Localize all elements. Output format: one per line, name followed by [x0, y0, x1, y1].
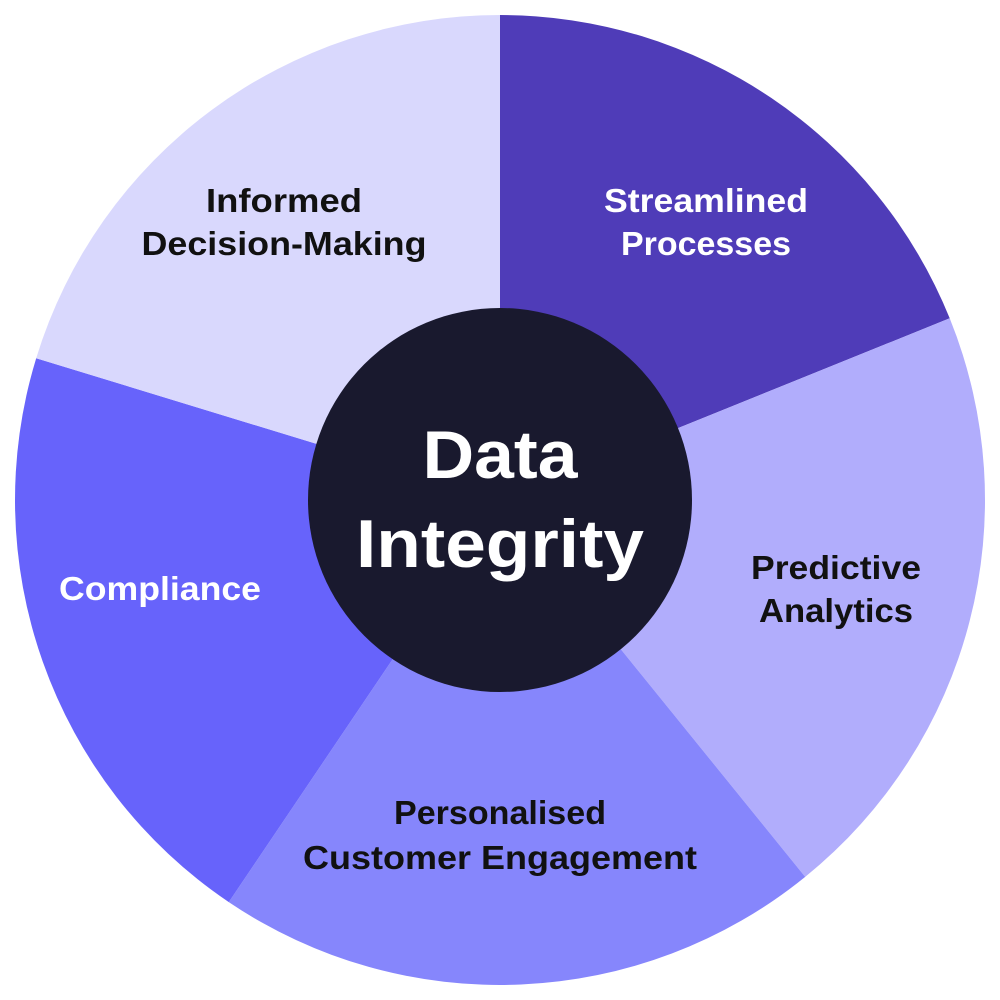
label: streamlined processes: Streamlined	[604, 182, 808, 219]
slice: streamlined processes	[500, 15, 950, 500]
label: compliance: Compliance	[59, 570, 261, 607]
label: informed decision-making: Decision-Making	[142, 225, 426, 262]
label: informed decision-making: Informed	[206, 182, 362, 219]
center circle: data integrity	[308, 308, 692, 692]
label: streamlined processes: Processes	[621, 225, 791, 262]
slice: informed decision-making	[36, 15, 500, 500]
slice: personalised customer engagement	[229, 500, 805, 985]
slice: predictive analytics	[500, 318, 985, 877]
label: predictive analytics: Predictive	[751, 549, 921, 586]
slice: compliance	[15, 358, 500, 902]
label: predictive analytics: Analytics	[759, 592, 913, 629]
center title: Integrity	[356, 506, 644, 582]
label: personalised customer engagement: Customer Engagement	[303, 839, 697, 876]
label: personalised customer engagement: Personalised	[394, 794, 606, 831]
center title: Data	[422, 417, 579, 493]
